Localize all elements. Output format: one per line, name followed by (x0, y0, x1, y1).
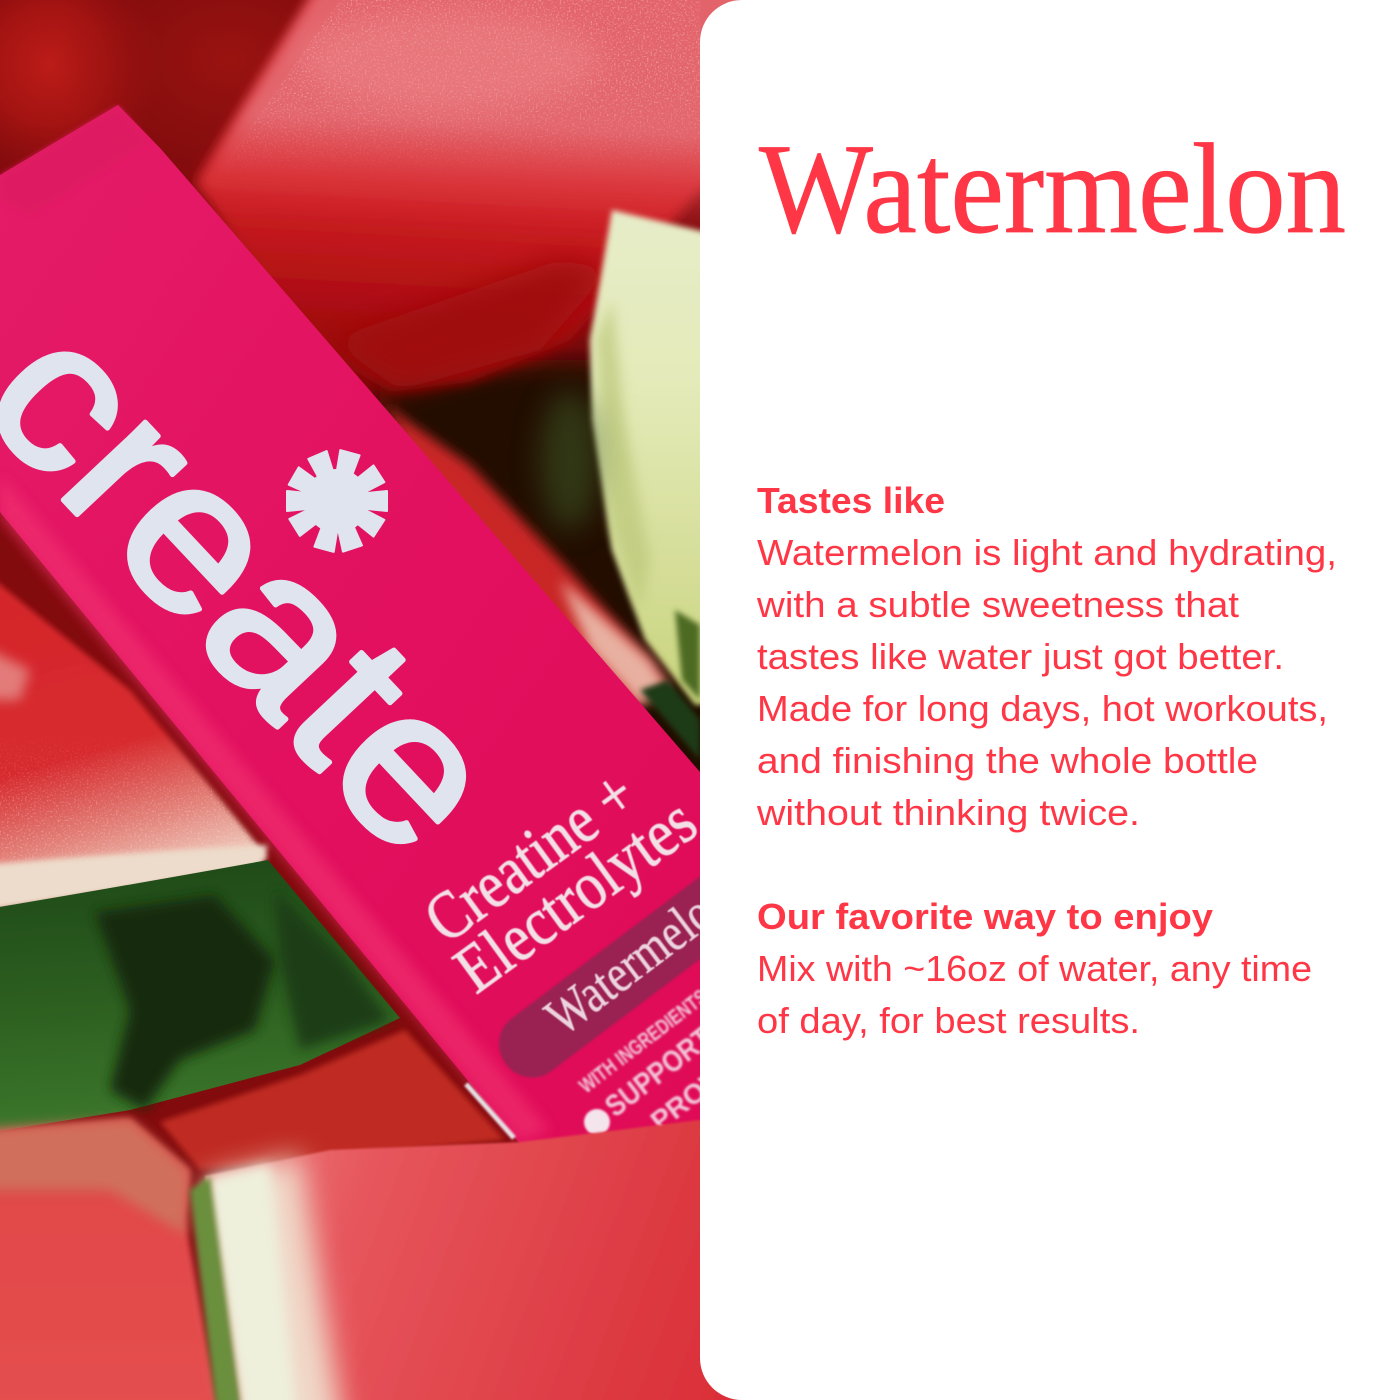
panel: white text card (700, 0, 1400, 1400)
packet text: Creatine + Electrolytes (428, 780, 698, 996)
packet small print: WITH INGREDIENTS (575, 985, 712, 1098)
packet small print (576, 988, 700, 1134)
packet small print: PROV (645, 1063, 727, 1137)
rind: right slice (585, 206, 700, 710)
slice: left with green rind (0, 560, 400, 1136)
packet pill: Watermelon: Watermelon (534, 869, 742, 1047)
text block: tastes like: Watermelon is light and hydrating, (757, 532, 1337, 573)
photo: watermelon slices with create packet (0, 0, 800, 1400)
text block: tastes like: Tastes like (757, 480, 945, 521)
text block: tastes like: and finishing the whole bottle (757, 740, 1258, 781)
text block: tastes like: Made for long days, hot workouts, (757, 688, 1328, 729)
background: dark red blur (0, 0, 760, 1400)
text block: tastes like: tastes like water just got better. (757, 636, 1284, 677)
text block: tastes like (756, 480, 1337, 833)
packet text: Creatine + Electrolytes: Creatine + (410, 755, 649, 957)
text block: our favorite way to enjoy: Our favorite way to enjoy (757, 896, 1214, 937)
text block: our favorite way to enjoy: of day, for best results. (757, 1000, 1140, 1041)
slice: top wedge (196, 0, 800, 392)
text block: tastes like: without thinking twice. (756, 792, 1140, 833)
text block: our favorite way to enjoy: Mix with ~16oz of water, any time (757, 948, 1312, 989)
packet (0, 104, 700, 1144)
title: Watermelon (759, 117, 1346, 260)
text block: tastes like: with a subtle sweetness that (756, 584, 1239, 625)
icon: asterisk burst (287, 450, 387, 552)
packet pill: Watermelon (498, 875, 700, 1079)
packet small print: SUPPORT (599, 1021, 718, 1124)
packet text: Creatine + Electrolytes: Electrolytes (440, 782, 710, 1007)
slice: bottom left (0, 1118, 224, 1400)
slice: lower red piece (160, 1030, 505, 1170)
text block: our favorite way to enjoy (757, 896, 1312, 1041)
slice: bottom wedge (190, 1120, 800, 1400)
slice: behind packet (385, 390, 700, 760)
